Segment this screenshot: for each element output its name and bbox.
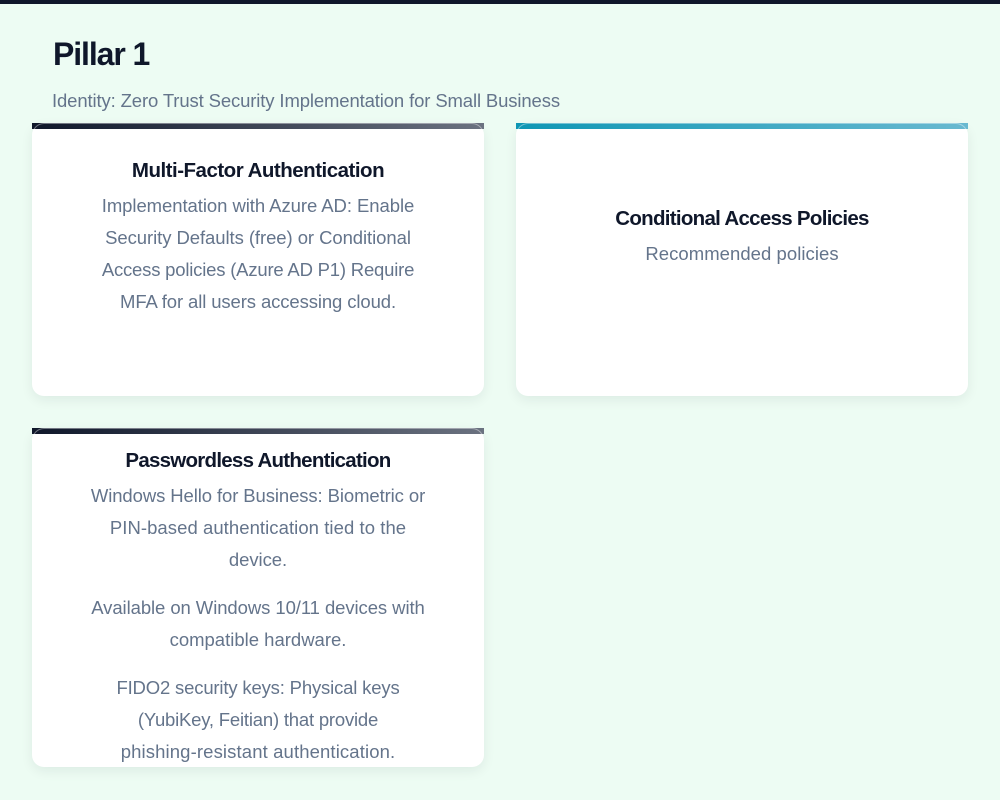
panel body text: Access policies (Azure AD P1) Require [102,259,414,280]
fido2 text [116,677,400,762]
panel: passwordless authentication [32,428,484,767]
panel heading: Passwordless Authentication [125,449,391,472]
hardware availability text: Available on Windows 10/11 devices with [91,597,425,618]
top accent bar [0,0,1000,4]
windows hello text: Windows Hello for Business: Biometric or [91,485,425,506]
panel: conditional access policies [516,123,968,396]
hardware availability text: compatible hardware. [170,629,346,650]
windows hello text: device. [229,549,287,570]
fido2 text: (YubiKey, Feitian) that provide [138,709,378,730]
windows hello text [91,485,425,570]
title: Pillar 1 [53,36,149,72]
panel body text [102,195,414,312]
fido2 text: FIDO2 security keys: Physical keys [116,677,400,698]
panel body text: MFA for all users accessing cloud. [120,291,396,312]
subtitle: Identity: Zero Trust Security Implementation for Small Business [52,90,560,111]
panel body text: Implementation with Azure AD: Enable [102,195,414,216]
windows hello text: PIN-based authentication tied to the [110,517,406,538]
panel: multi-factor authentication [32,123,484,396]
panel body text: Recommended policies [645,243,839,264]
panel body text: Security Defaults (free) or Conditional [105,227,411,248]
fido2 text: phishing-resistant authentication. [121,741,395,762]
panel accent bar [32,428,484,434]
panel accent bar [32,123,484,129]
panel heading: Multi-Factor Authentication [132,159,384,182]
panel heading: Conditional Access Policies [615,207,869,230]
panel accent bar [516,123,968,129]
hardware availability text [91,597,425,650]
